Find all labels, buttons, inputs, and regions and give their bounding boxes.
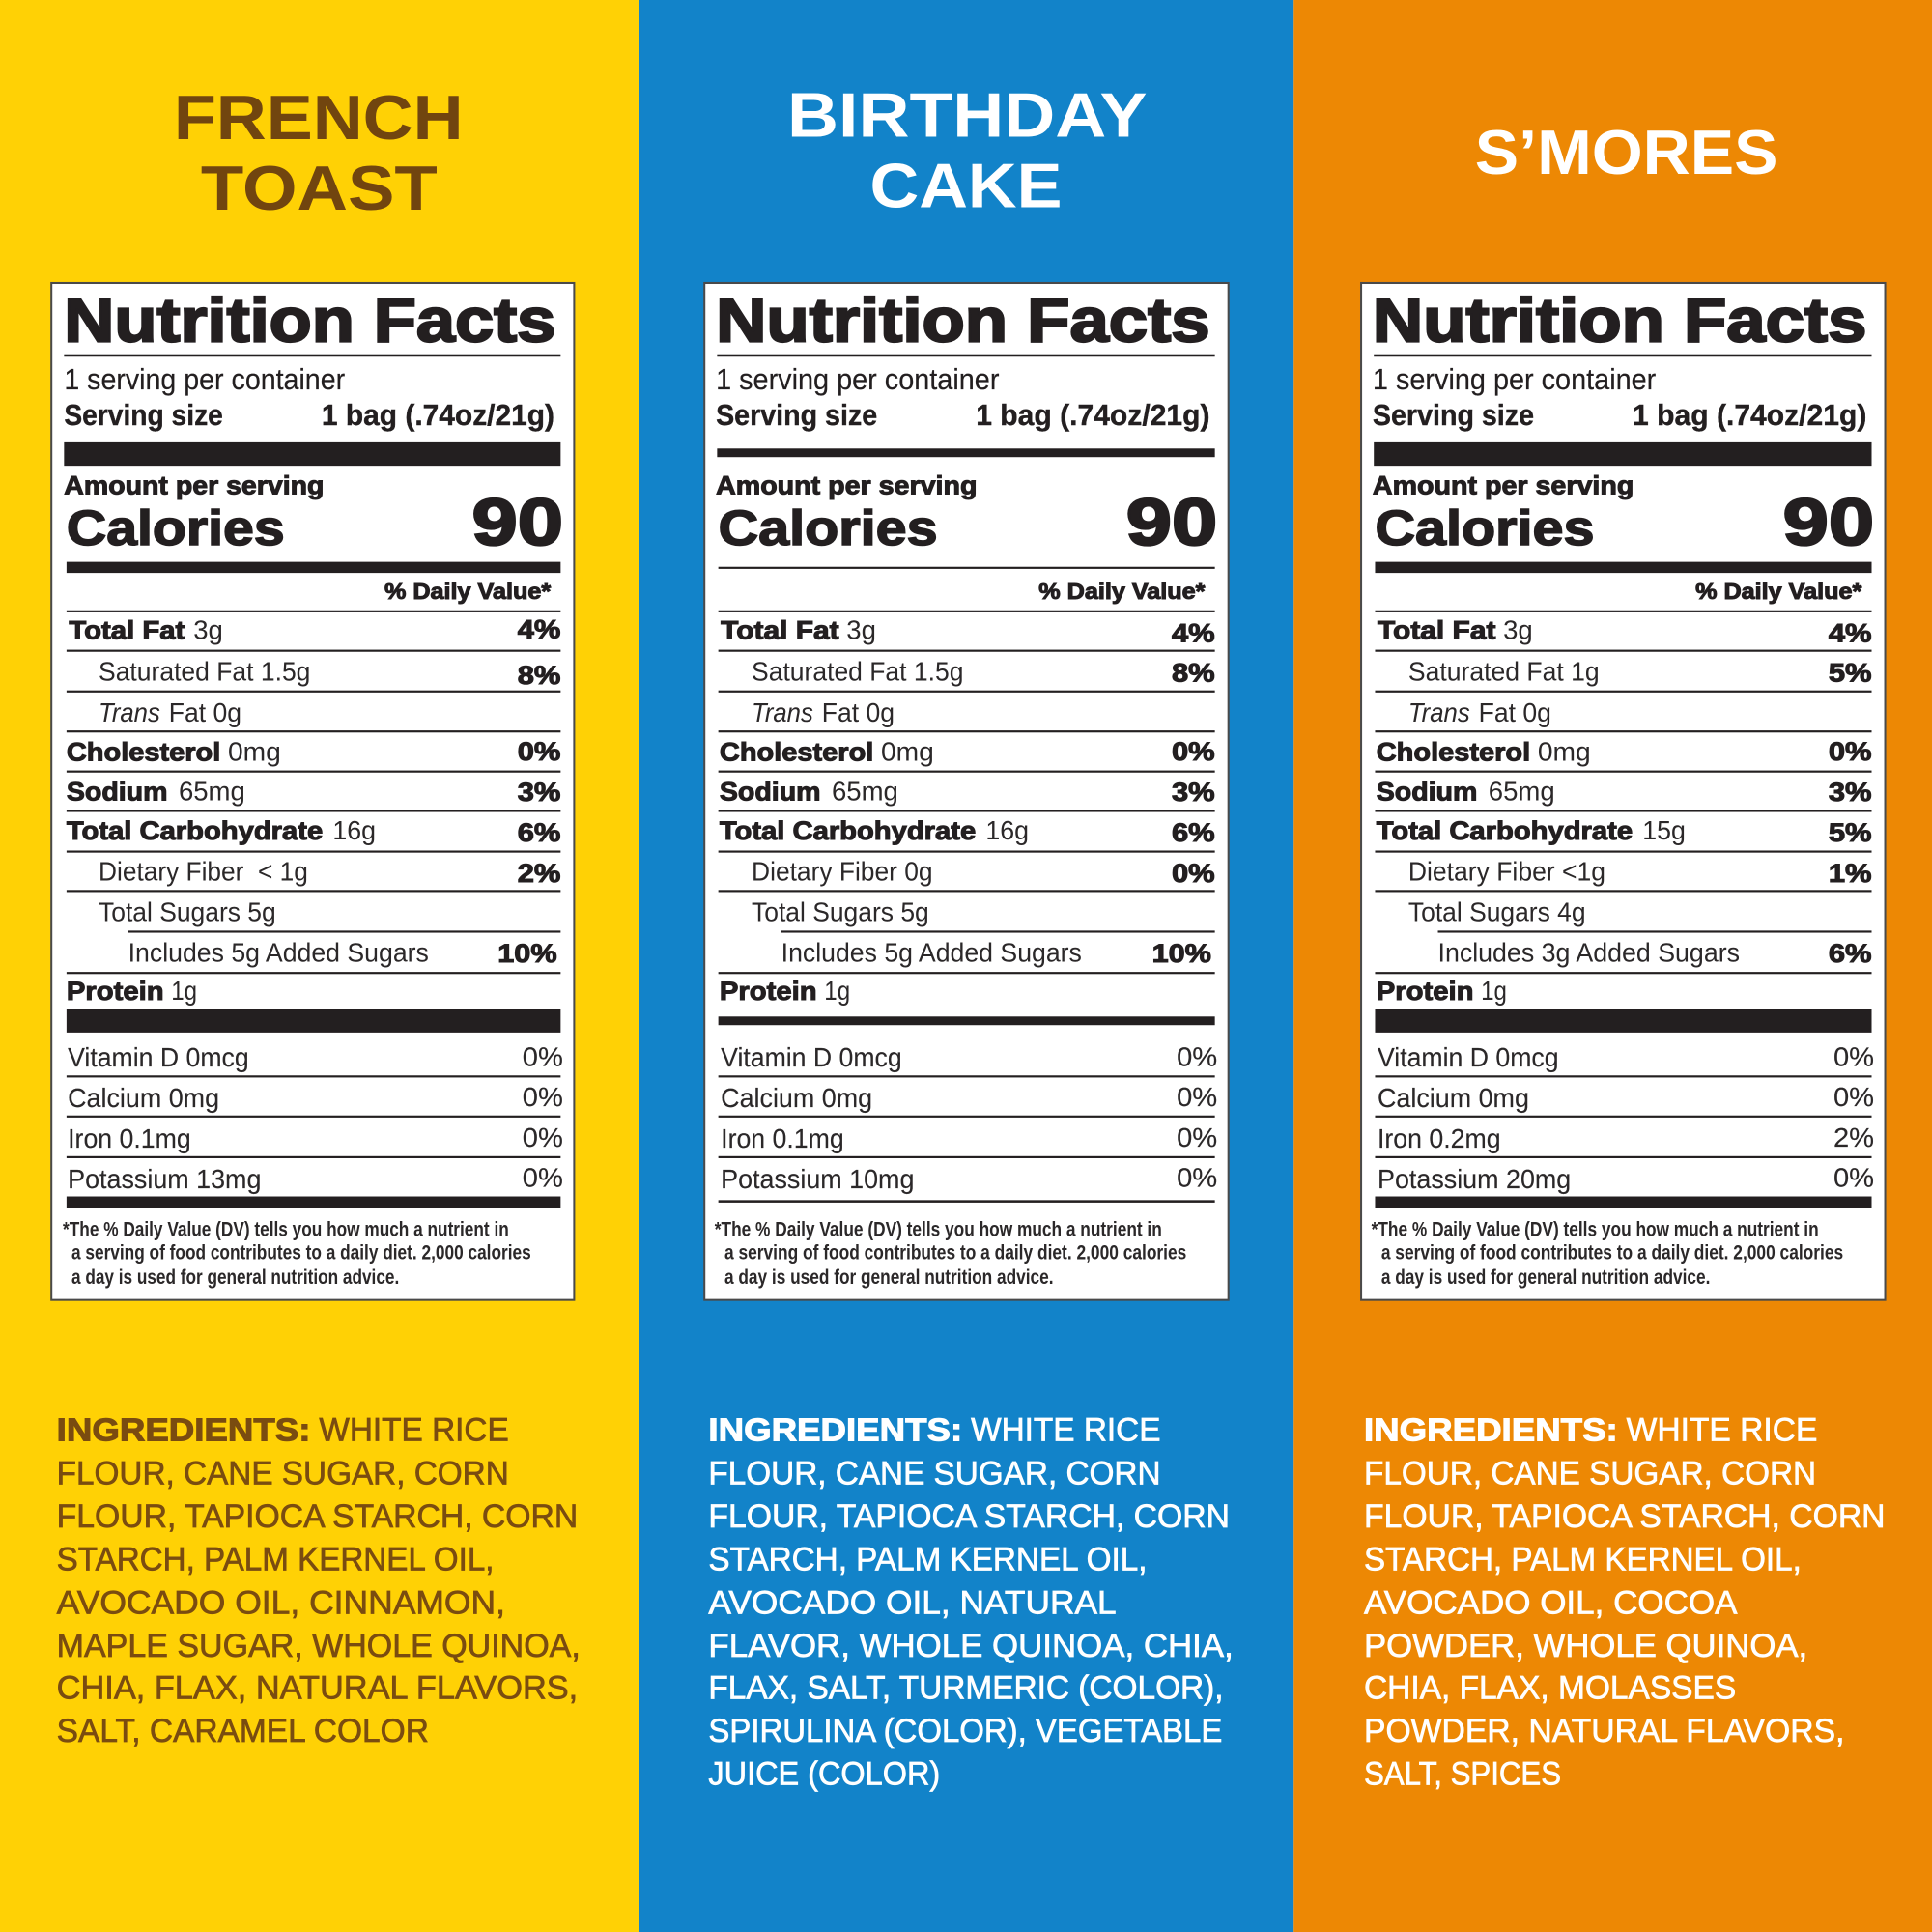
footnote <box>63 1216 531 1289</box>
ingredients: French Toast: WHITE RICE <box>319 1412 509 1449</box>
nutrition label: French Toast <box>51 283 574 1300</box>
row: Total Carbohydrate: Total Carbohydrate <box>720 816 976 845</box>
row: Iron: Iron 0.1mg <box>721 1123 844 1153</box>
calories block: 90 <box>472 485 563 559</box>
row: Iron: 2% <box>1833 1122 1874 1152</box>
row: Sodium: Sodium <box>67 777 167 806</box>
serving information: 1 bag (.74oz/21g) <box>322 399 554 432</box>
row: Iron <box>68 1122 563 1153</box>
ingredients: S'mores: POWDER, NATURAL FLAVORS, <box>1364 1713 1844 1749</box>
row: Cholesterol: 0% <box>518 737 561 766</box>
row: Total Carbohydrate: 16g <box>985 815 1029 845</box>
ingredients: French Toast: FLOUR, CANE SUGAR, CORN <box>57 1455 509 1492</box>
row: Iron: Iron 0.2mg <box>1378 1123 1501 1153</box>
row: Vitamin D <box>721 1041 1217 1072</box>
ingredients: Birthday Cake: INGREDIENTS: <box>708 1413 962 1449</box>
row: Calcium: Calcium 0mg <box>1378 1083 1529 1113</box>
serving information: Serving size <box>716 399 877 432</box>
row: Total Fat: 4% <box>518 615 561 644</box>
calories block <box>64 470 563 559</box>
row: Total Carbohydrate <box>1377 815 1872 847</box>
title: French Toast <box>174 82 464 223</box>
row: Cholesterol <box>67 737 561 767</box>
row: Iron <box>1378 1122 1874 1153</box>
panel: Birthday Cake <box>639 0 1293 1932</box>
heading: Nutrition Facts: Nutrition Facts <box>1373 285 1866 355</box>
row: Vitamin D <box>68 1041 563 1072</box>
row: Total Carbohydrate <box>720 815 1215 847</box>
row: Total Carbohydrate: 16g <box>332 815 376 845</box>
calories block <box>1373 470 1874 559</box>
row: Protein: 1g <box>171 976 197 1006</box>
row: Total Fat: 4% <box>1172 619 1215 648</box>
footnote <box>715 1216 1186 1289</box>
row: Cholesterol: 0% <box>1829 737 1872 766</box>
row: Cholesterol: 0mg <box>1538 737 1591 767</box>
ingredients: S'mores: WHITE RICE <box>1627 1412 1817 1449</box>
row: Vitamin D: Vitamin D 0mcg <box>68 1042 249 1072</box>
label box <box>51 283 574 1300</box>
calories block: 90 <box>1126 485 1217 559</box>
ingredients: Birthday Cake: STARCH, PALM KERNEL OIL, <box>708 1542 1147 1578</box>
footnote: a serving of food contributes to a daily diet. 2,000 calories <box>724 1240 1186 1264</box>
row: Total Fat <box>1378 614 1872 648</box>
row: Sodium: Sodium <box>1377 777 1477 806</box>
row: Sodium: 3% <box>518 778 561 807</box>
row: Potassium <box>721 1162 1217 1194</box>
ingredients: French Toast: FLOUR, TAPIOCA STARCH, CORN <box>57 1498 578 1535</box>
row: Calcium <box>68 1082 563 1113</box>
heading: Nutrition Facts: Nutrition Facts <box>716 285 1210 355</box>
ingredients: S'mores <box>1364 1412 1886 1793</box>
row: Cholesterol: Cholesterol <box>67 738 220 767</box>
row: Vitamin D: 0% <box>1177 1041 1217 1071</box>
row: Protein: 1g <box>824 976 850 1006</box>
row: Sodium: 65mg <box>1489 776 1555 806</box>
row: Sodium <box>1377 776 1872 807</box>
row: Calcium <box>721 1082 1217 1113</box>
ingredients: S'mores: POWDER, WHOLE QUINOA, <box>1364 1628 1807 1664</box>
ingredients: French Toast: MAPLE SUGAR, WHOLE QUINOA, <box>57 1628 581 1664</box>
row: Total Carbohydrate: 5% <box>1829 818 1872 847</box>
row: Vitamin D: Vitamin D 0mcg <box>1378 1042 1559 1072</box>
row: Dietary Fiber: Dietary Fiber 0g <box>752 856 933 886</box>
row: Total Fat: 3g <box>846 614 876 644</box>
row: Added Sugars: Includes 5g Added Sugars <box>128 938 429 968</box>
row: Added Sugars: 6% <box>1829 939 1872 968</box>
serving information: 1 bag (.74oz/21g) <box>1633 399 1866 432</box>
calories block: Amount per serving <box>1373 470 1634 499</box>
daily value header: % Daily Value* <box>1038 579 1206 604</box>
row: Trans Fat: Trans <box>752 697 813 727</box>
row: Sodium: Sodium <box>720 777 820 806</box>
serving information: 1 bag (.74oz/21g) <box>976 399 1210 432</box>
row: Added Sugars: 10% <box>1152 939 1211 968</box>
footnote <box>1372 1216 1843 1289</box>
row: Potassium <box>1378 1162 1874 1194</box>
calories block: Calories <box>719 500 938 555</box>
row: Sodium <box>720 776 1215 807</box>
row: Dietary Fiber: 0% <box>1172 859 1215 888</box>
row: Vitamin D: 0% <box>1833 1041 1874 1071</box>
ingredients: Birthday Cake: JUICE (COLOR) <box>708 1756 940 1793</box>
row: Cholesterol: 0mg <box>228 737 281 767</box>
row: Saturated Fat <box>1408 657 1872 687</box>
title: French Toast: FRENCH <box>174 82 464 153</box>
serving information: Serving size <box>64 399 223 432</box>
row: Total Fat <box>721 614 1215 648</box>
row: Potassium <box>68 1162 563 1194</box>
footnote: a day is used for general nutrition advice. <box>724 1264 1054 1289</box>
row: Saturated Fat: 8% <box>518 661 561 690</box>
serving information: 1 serving per container <box>1373 363 1656 396</box>
serving information <box>1373 363 1866 432</box>
row: Potassium: Potassium 13mg <box>68 1164 261 1194</box>
row: Dietary Fiber: 1% <box>1829 859 1872 888</box>
row: Trans Fat: Fat 0g <box>169 697 242 727</box>
footnote: a day is used for general nutrition advice. <box>1381 1264 1710 1289</box>
ingredients: French Toast: CHIA, FLAX, NATURAL FLAVORS, <box>57 1669 578 1706</box>
row: Added Sugars: Includes 3g Added Sugars <box>1438 938 1740 968</box>
row: Protein: Protein <box>1377 977 1474 1006</box>
row: Saturated Fat: 5% <box>1829 658 1872 687</box>
row: Iron: 0% <box>523 1122 563 1152</box>
nutrition label: Birthday Cake <box>704 283 1229 1300</box>
row: Saturated Fat: Saturated Fat 1.5g <box>752 657 963 687</box>
row: Total Fat: 3g <box>1503 614 1533 644</box>
row: Total Carbohydrate <box>67 815 561 847</box>
row: Potassium: 0% <box>1833 1162 1874 1192</box>
panel: S'mores <box>1293 0 1932 1932</box>
row: Sodium: 3% <box>1172 778 1215 807</box>
row: Cholesterol <box>720 737 1215 767</box>
serving information <box>716 363 1210 432</box>
calories block <box>716 470 1217 559</box>
row: Added Sugars: Includes 5g Added Sugars <box>781 938 1082 968</box>
ingredients: French Toast: AVOCADO OIL, CINNAMON, <box>57 1584 505 1621</box>
row: Protein <box>720 976 850 1006</box>
row: Protein <box>1377 976 1507 1006</box>
row: Trans Fat <box>99 697 242 727</box>
heading: Nutrition Facts: Nutrition Facts <box>64 285 555 355</box>
title: Birthday Cake <box>787 80 1148 220</box>
row: Trans Fat: Fat 0g <box>822 697 895 727</box>
row: Iron <box>721 1122 1217 1153</box>
ingredients: S'mores: FLOUR, CANE SUGAR, CORN <box>1364 1455 1816 1492</box>
title: S'mores: S’MORES <box>1475 117 1778 187</box>
row: Total Sugars: Total Sugars 4g <box>1408 896 1586 926</box>
row: Total Fat: Total Fat <box>721 615 839 644</box>
row: Total Fat: 4% <box>1829 619 1872 648</box>
footnote: a day is used for general nutrition advice. <box>71 1264 399 1289</box>
row: Protein: Protein <box>720 977 817 1006</box>
row: Calcium: Calcium 0mg <box>68 1083 219 1113</box>
ingredients: Birthday Cake: FLAX, SALT, TURMERIC (COLOR), <box>708 1669 1224 1706</box>
panel background: blue <box>639 0 1293 1932</box>
serving information: 1 serving per container <box>716 363 999 396</box>
row: Total Fat <box>69 614 561 644</box>
row: Sodium: 65mg <box>179 776 245 806</box>
row: Dietary Fiber <box>99 856 561 888</box>
footnote: *The % Daily Value (DV) tells you how much a nutrient in <box>1372 1216 1819 1240</box>
row: Potassium: 0% <box>523 1162 563 1192</box>
ingredients: S'mores: SALT, SPICES <box>1364 1756 1561 1793</box>
row: Trans Fat <box>752 697 895 727</box>
serving information: 1 serving per container <box>64 363 345 396</box>
row: Total Sugars: Total Sugars 5g <box>99 896 276 926</box>
ingredients: Birthday Cake: FLOUR, CANE SUGAR, CORN <box>708 1455 1161 1492</box>
row: Sodium: 65mg <box>832 776 898 806</box>
title: Birthday Cake: BIRTHDAY <box>787 80 1148 151</box>
calories block: Amount per serving <box>64 470 324 499</box>
row: Calcium <box>1378 1082 1874 1113</box>
row: Trans Fat: Trans <box>99 697 160 727</box>
footnote: *The % Daily Value (DV) tells you how much a nutrient in <box>63 1216 509 1240</box>
row: Saturated Fat <box>752 657 1215 687</box>
row: Cholesterol: 0mg <box>881 737 934 767</box>
row: Vitamin D: 0% <box>523 1041 563 1071</box>
row: Cholesterol <box>1377 737 1872 767</box>
title: French Toast: TOAST <box>201 153 438 223</box>
row: Total Carbohydrate: 6% <box>1172 818 1215 847</box>
row: Dietary Fiber: Dietary Fiber < 1g <box>99 856 308 886</box>
row: Total Carbohydrate: Total Carbohydrate <box>67 816 323 845</box>
row: Total Carbohydrate: Total Carbohydrate <box>1377 816 1633 845</box>
panel: French Toast <box>0 0 639 1932</box>
row: Vitamin D <box>1378 1041 1874 1072</box>
label box <box>1361 283 1886 1300</box>
ingredients: French Toast: SALT, CARAMEL COLOR <box>57 1713 429 1749</box>
row: Vitamin D: Vitamin D 0mcg <box>721 1042 902 1072</box>
row: Saturated Fat <box>99 657 561 690</box>
row: Added Sugars: 10% <box>497 939 557 968</box>
row: Iron: Iron 0.1mg <box>68 1123 191 1153</box>
row: Protein <box>67 976 197 1006</box>
row: Total Fat: 3g <box>193 614 223 644</box>
label box <box>704 283 1229 1300</box>
footnote: a serving of food contributes to a daily diet. 2,000 calories <box>71 1240 531 1264</box>
row: Calcium: Calcium 0mg <box>721 1083 872 1113</box>
row: Trans Fat: Fat 0g <box>1479 697 1551 727</box>
nutrition label: S'mores <box>1361 283 1886 1300</box>
daily value header: % Daily Value* <box>384 579 551 604</box>
ingredients: French Toast: STARCH, PALM KERNEL OIL, <box>57 1542 494 1578</box>
row: Sodium <box>67 776 561 807</box>
row: Potassium: 0% <box>1177 1162 1217 1192</box>
row: Protein: 1g <box>1481 976 1507 1006</box>
row: Total Sugars: Total Sugars 5g <box>752 896 929 926</box>
ingredients: French Toast: INGREDIENTS: <box>57 1413 310 1449</box>
row: Potassium: Potassium 20mg <box>1378 1164 1571 1194</box>
ingredients: S'mores: AVOCADO OIL, COCOA <box>1364 1584 1738 1621</box>
row: Dietary Fiber <box>752 856 1215 888</box>
row: Calcium: 0% <box>1833 1082 1874 1112</box>
row: Dietary Fiber: 2% <box>518 859 561 888</box>
row: Total Fat: Total Fat <box>69 615 185 644</box>
row: Total Carbohydrate: 15g <box>1642 815 1686 845</box>
calories block: 90 <box>1783 485 1874 559</box>
row: Trans Fat <box>1408 697 1551 727</box>
ingredients: French Toast <box>57 1412 581 1749</box>
row: Protein: Protein <box>67 977 164 1006</box>
calories block: Calories <box>1375 500 1595 555</box>
ingredients: Birthday Cake: AVOCADO OIL, NATURAL <box>708 1584 1117 1621</box>
ingredients: S'mores: CHIA, FLAX, MOLASSES <box>1364 1669 1736 1706</box>
ingredients: Birthday Cake: FLAVOR, WHOLE QUINOA, CHIA, <box>708 1628 1234 1664</box>
row: Calcium: 0% <box>1177 1082 1217 1112</box>
row: Total Fat: Total Fat <box>1378 615 1496 644</box>
ingredients: S'mores: INGREDIENTS: <box>1364 1413 1618 1449</box>
serving information <box>64 363 554 432</box>
title: Birthday Cake: CAKE <box>870 150 1062 220</box>
row: Cholesterol: 0% <box>1172 737 1215 766</box>
ingredients: Birthday Cake: WHITE RICE <box>971 1412 1161 1449</box>
ingredients: S'mores: FLOUR, TAPIOCA STARCH, CORN <box>1364 1498 1886 1535</box>
row: Total Carbohydrate: 6% <box>518 818 561 847</box>
row: Potassium: Potassium 10mg <box>721 1164 914 1194</box>
panel background: orange <box>1293 0 1932 1932</box>
row: Dietary Fiber <box>1408 856 1872 888</box>
ingredients: S'mores: STARCH, PALM KERNEL OIL, <box>1364 1542 1802 1578</box>
daily value header: % Daily Value* <box>1695 579 1861 604</box>
row: Saturated Fat: 8% <box>1172 658 1215 687</box>
ingredients: Birthday Cake: FLOUR, TAPIOCA STARCH, CORN <box>708 1498 1230 1535</box>
row: Saturated Fat: Saturated Fat 1.5g <box>99 657 310 687</box>
row: Cholesterol: Cholesterol <box>1377 738 1530 767</box>
footnote: *The % Daily Value (DV) tells you how much a nutrient in <box>715 1216 1162 1240</box>
row: Sodium: 3% <box>1829 778 1872 807</box>
serving information: Serving size <box>1373 399 1534 432</box>
row: Calcium: 0% <box>523 1082 563 1112</box>
ingredients: Birthday Cake: SPIRULINA (COLOR), VEGETABLE <box>708 1713 1222 1749</box>
row: Trans Fat: Trans <box>1408 697 1470 727</box>
panel background: yellow <box>0 0 639 1932</box>
ingredients: Birthday Cake <box>708 1412 1234 1793</box>
row: Saturated Fat: Saturated Fat 1g <box>1408 657 1600 687</box>
calories block: Calories <box>67 500 285 555</box>
row: Dietary Fiber: Dietary Fiber <1g <box>1408 856 1605 886</box>
row: Iron: 0% <box>1177 1122 1217 1152</box>
calories block: Amount per serving <box>716 470 977 499</box>
row: Cholesterol: Cholesterol <box>720 738 873 767</box>
